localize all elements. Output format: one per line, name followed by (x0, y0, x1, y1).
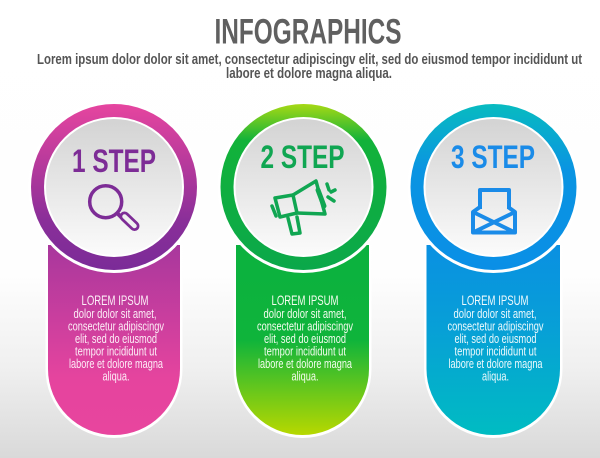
step 2 badge ring (218, 101, 390, 273)
step 2 text: dolor dolor sit amet, (264, 307, 346, 321)
step 2 text: aliqua. (292, 370, 318, 384)
step 3 heading: 3 STEP (451, 139, 535, 175)
step 1 text: consectetur adipiscingv (68, 320, 165, 334)
step 2 text: labore et dolore magna (258, 357, 352, 371)
panel: step 3 (408, 101, 580, 438)
icon: megaphone (272, 181, 335, 234)
step 3 text: consectetur adipiscingv (448, 320, 544, 334)
panel: step 1 (28, 101, 200, 438)
step 2 text (257, 292, 354, 384)
intro text: labore et dolore magna aliqua. (226, 65, 392, 82)
step 3 text: aliqua. (482, 370, 509, 384)
step 3 text: tempor incididunt ut (454, 344, 537, 358)
step 3 text: elit, sed do eiusmod (454, 332, 537, 346)
icon: open envelope (473, 190, 515, 232)
step 3 text (448, 292, 544, 384)
step 3 text: labore et dolore magna (448, 357, 543, 371)
step 2 text: elit, sed do eiusmod (264, 332, 346, 346)
title: INFOGRAPHICS (214, 12, 402, 52)
step 1 text: LOREM IPSUM (82, 292, 148, 308)
step 1 badge ring (28, 101, 200, 273)
step 1 heading: 1 STEP (72, 143, 156, 179)
panel: step 2 (218, 101, 390, 438)
step 2 text: consectetur adipiscingv (257, 320, 354, 334)
step 1 text: elit, sed do eiusmod (75, 332, 157, 346)
intro text (37, 51, 582, 82)
step 1 text: aliqua. (102, 370, 130, 384)
step 2 text: tempor incididunt ut (264, 344, 346, 358)
step 3 text: dolor dolor sit amet, (454, 307, 536, 321)
icon: magnifying glass (90, 186, 134, 226)
step 1 body pill (46, 245, 182, 438)
step 2 text: LOREM IPSUM (272, 292, 338, 308)
step 1 text: tempor incididunt ut (75, 344, 157, 358)
step 1 text (68, 292, 165, 384)
step 1 text: labore et dolore magna (69, 357, 163, 371)
step 3 badge ring (408, 101, 580, 273)
step 3 body pill (424, 245, 562, 438)
step 1 text: dolor dolor sit amet, (74, 307, 156, 321)
step 3 text: LOREM IPSUM (462, 292, 528, 308)
step 2 heading: 2 STEP (260, 139, 344, 175)
step 2 body pill (234, 245, 372, 438)
